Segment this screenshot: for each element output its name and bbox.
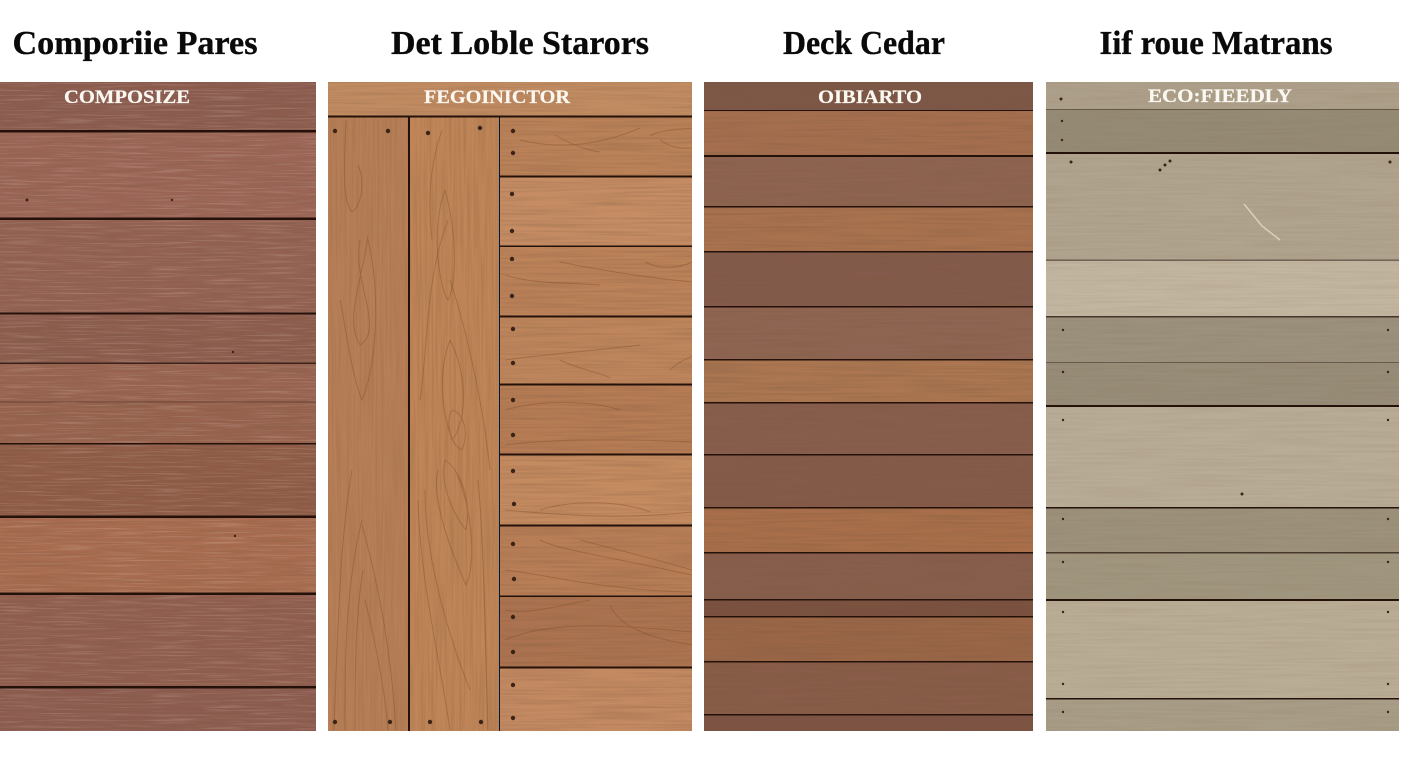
panel label: FEGOINICTOR: FEGOINICTOR xyxy=(424,87,570,108)
heading: Composite Pares: Comporiie Pares xyxy=(12,25,258,62)
panel label: COMPOSIZE: COMPOSIZE xyxy=(64,87,190,108)
heading: Det Loble Starors: Det Loble Starors xyxy=(391,25,649,62)
panel: wood boards xyxy=(328,82,692,731)
heading: Iif roue Matrans: Iif roue Matrans xyxy=(1100,25,1332,62)
heading: Deck Cedar: Deck Cedar xyxy=(783,25,945,62)
wood grain cathedrals xyxy=(334,120,692,730)
panel label: OIBIARTO: OIBIARTO xyxy=(818,87,922,108)
screws xyxy=(333,126,516,724)
fastener dots xyxy=(1060,94,1392,713)
panel label: ECO:FIEENDLY: ECO:FIEEDLY xyxy=(1148,86,1292,107)
panel: deck cedar xyxy=(704,82,1033,731)
panel: composite decking xyxy=(0,82,316,731)
scratch mark xyxy=(1244,204,1280,240)
panel: eco-friendly boards xyxy=(1046,82,1399,731)
